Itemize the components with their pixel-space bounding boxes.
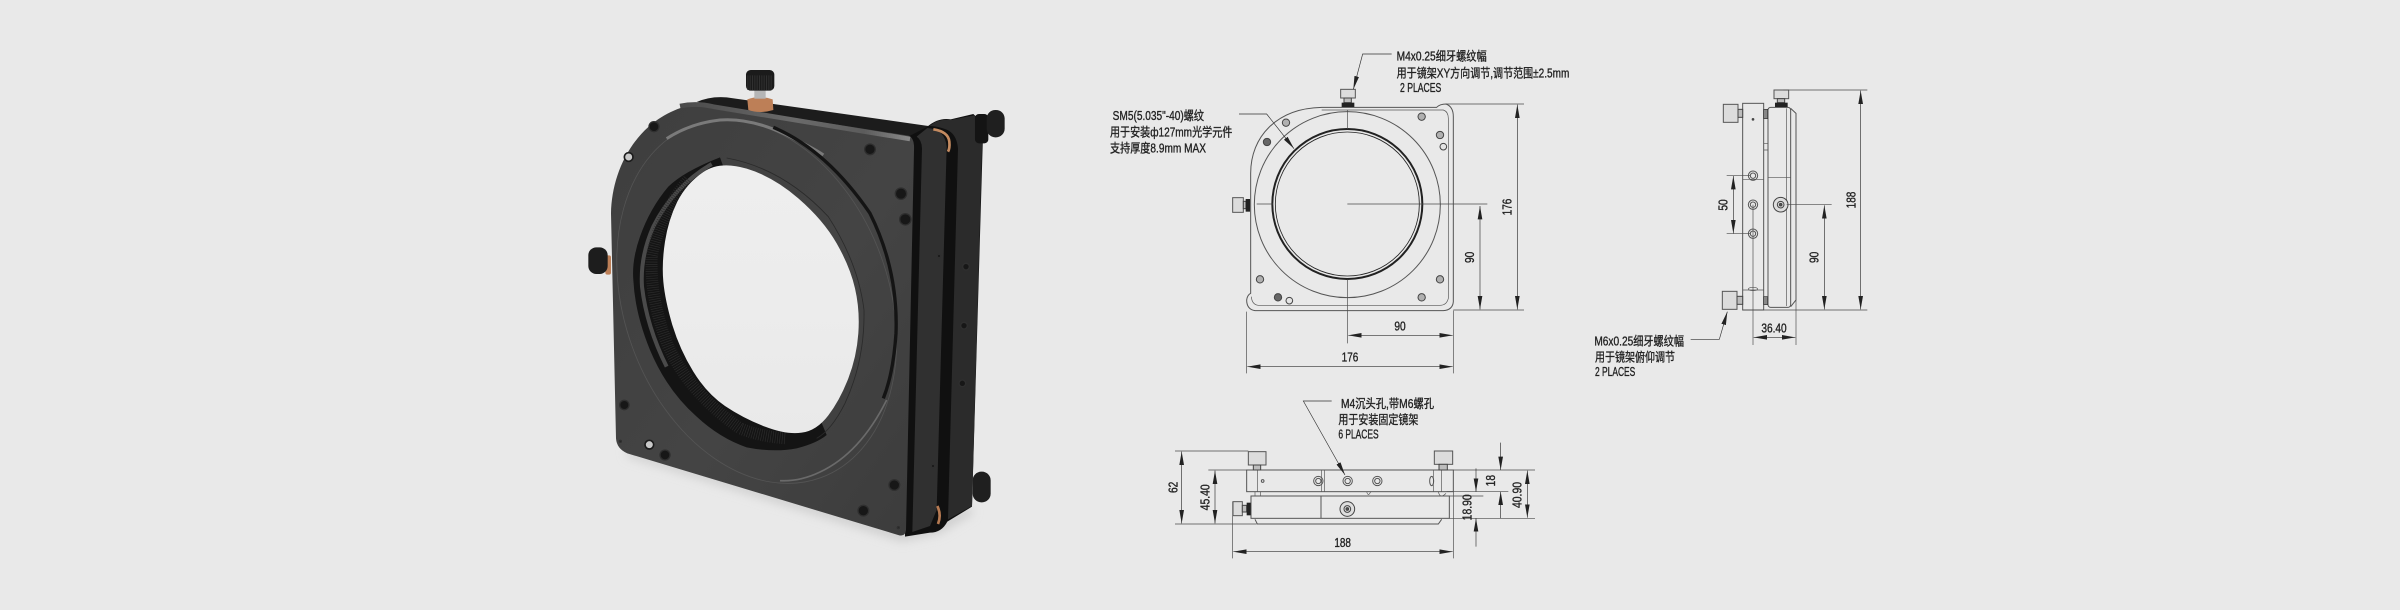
lens aperture: [663, 165, 859, 433]
aperture edge line: [727, 158, 864, 438]
callout: M6 knob: 2 PLACES: [1595, 365, 1635, 379]
side view drawing: [1594, 90, 1867, 379]
callout: M4 holes: 6 PLACES: [1338, 428, 1379, 442]
dimension: 18.90: 18.90: [1460, 494, 1474, 520]
callout: M4 holes: [1338, 397, 1434, 442]
rear knobs: [1248, 451, 1453, 470]
dimension: width 176: 176: [1342, 350, 1358, 364]
callout: SM5 thread: 支持厚度8.9mm MAX: [1110, 141, 1206, 156]
adjuster knob: [1773, 197, 1788, 212]
top knob: [1774, 90, 1789, 107]
callout: SM5 thread: [1110, 109, 1233, 156]
aperture: [1272, 129, 1422, 279]
silver set screws: [624, 153, 654, 449]
dimension: 40.90: [1511, 471, 1527, 518]
counterbore holes: [1261, 476, 1434, 486]
spacer screws: [1764, 109, 1768, 305]
callout: knob thread: 用于镜架XY方向调节,调节范围±2.5mm: [1397, 65, 1569, 80]
dimension: 45.40: [1199, 470, 1247, 523]
center lines: [1257, 110, 1487, 343]
soft shadow: [627, 448, 973, 542]
leader: SM5 thread: [1239, 114, 1294, 149]
callout: SM5 thread: SM5(5.035"-40)螺纹: [1113, 109, 1204, 123]
callout: M4 holes: 用于安装固定镜架: [1338, 413, 1419, 427]
callout: SM5 thread: 用于安装ф127mm光学元件: [1110, 125, 1233, 140]
thread texture: [652, 180, 787, 438]
lower body: [1251, 492, 1449, 524]
rear plate: [1743, 103, 1768, 310]
dimension: 36.40: 36.40: [1761, 321, 1787, 335]
dimension: offset 90 horizontal: [1348, 320, 1453, 335]
dimension: offset 90 vertical: 90: [1463, 252, 1477, 263]
rear knobs: [1722, 104, 1743, 309]
dark threaded recess: [633, 157, 827, 450]
callout: M6 knob: M6x0.25细牙螺纹幅: [1594, 334, 1684, 348]
dimension: 45.40: 45.40: [1199, 484, 1213, 510]
dimension: width 176: [1247, 311, 1453, 373]
dimension: 90: [1807, 205, 1824, 309]
upper body: [1247, 470, 1453, 492]
extension lines: [1233, 470, 1535, 558]
ring highlight and step: [667, 120, 896, 481]
dimension: height 176: 176: [1500, 199, 1514, 215]
dimension: 62: [1166, 451, 1257, 524]
dimension: 188: 188: [1334, 536, 1351, 550]
outer ring edge: [568, 80, 945, 523]
product photo: mirror mount: [568, 70, 1005, 542]
bottom view drawing: [1166, 397, 1535, 558]
top knob: [1341, 89, 1355, 107]
callout: knob thread: M4x0.25细牙螺纹幅: [1397, 50, 1487, 64]
front plate: [611, 103, 914, 536]
dimension: 36.40: [1754, 321, 1795, 337]
dimension: 50: [1716, 176, 1733, 233]
upper right knob: [933, 110, 1005, 152]
dimension: 50: 50: [1716, 199, 1730, 211]
callout: M4 holes: M4沉头孔,带M6螺孔: [1341, 397, 1434, 411]
leader: M6 knob: [1691, 312, 1727, 339]
dimension: height 176: [1446, 104, 1524, 310]
side adjuster knob: [1340, 502, 1355, 516]
plate outline: [1247, 104, 1453, 311]
lower right knob: [937, 472, 991, 524]
left knob: [1233, 502, 1251, 516]
dimension: 18.90: [1460, 468, 1476, 547]
recess lip: [642, 164, 712, 367]
plate screws: [619, 122, 969, 529]
dimension: 18: 18: [1484, 475, 1498, 486]
front plate: [1768, 107, 1796, 307]
leader: knob: [1353, 54, 1392, 89]
plate inner outline: [1251, 110, 1448, 305]
dimension: offset 90 vertical: [1463, 206, 1480, 309]
outer ring: [1254, 112, 1440, 298]
top rear band: [697, 97, 933, 140]
callout: knob thread: 2 PLACES: [1400, 81, 1441, 95]
dimension: 40.90: 40.90: [1511, 482, 1525, 508]
callout: M6 knob: [1594, 334, 1684, 379]
top knob: [746, 70, 774, 112]
left knob: [1233, 198, 1250, 212]
callout: M6 knob: 用于镜架俯仰调节: [1595, 349, 1675, 364]
plate top bevel: [680, 104, 910, 139]
extension lines: [1727, 90, 1867, 345]
side rails: [905, 114, 983, 537]
dimension: 62: 62: [1166, 482, 1180, 493]
leader: M4 holes: [1303, 401, 1345, 475]
left knob: [588, 247, 611, 275]
dimension: 90: 90: [1807, 252, 1821, 263]
dimension: 188: 188: [1845, 192, 1859, 208]
callout: knob thread: [1397, 50, 1569, 95]
mounting holes: [1748, 171, 1758, 238]
dimension: 18: [1484, 443, 1501, 518]
dimension: offset 90 horizontal: 90: [1394, 320, 1406, 334]
mounting screws: [1256, 113, 1447, 304]
front view drawing: [1110, 50, 1569, 373]
